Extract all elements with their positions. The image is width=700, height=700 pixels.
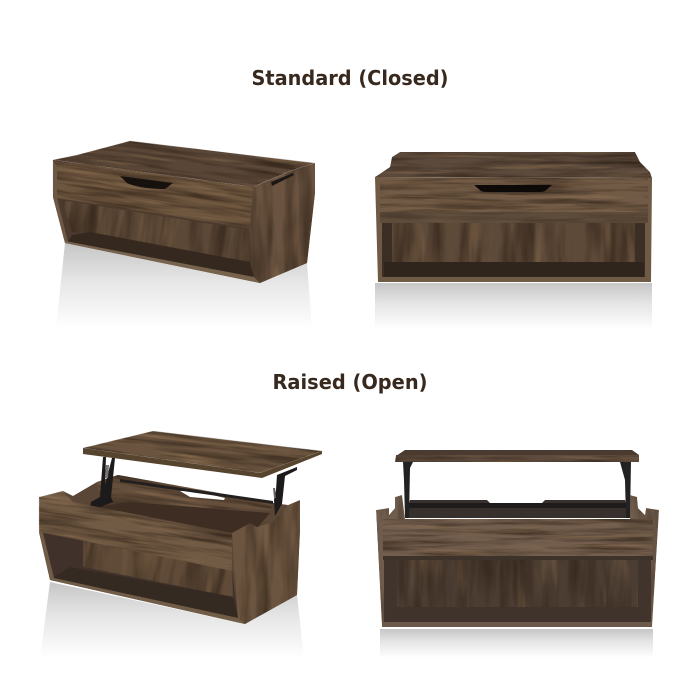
raised tabletop <box>395 450 639 462</box>
lower panel shade <box>380 212 648 223</box>
interior back wall <box>42 475 288 536</box>
floor shadow <box>375 283 652 330</box>
floor shadow <box>380 629 653 658</box>
front panel <box>380 178 648 223</box>
tabletop <box>47 109 321 219</box>
back panel <box>405 500 630 518</box>
back boards <box>74 518 242 620</box>
right lift mechanism <box>620 462 631 518</box>
title: Standard (Closed): Standard (Closed) <box>252 66 448 90</box>
opening <box>384 560 651 622</box>
back boards <box>55 177 257 285</box>
support bar <box>405 503 630 508</box>
right side panel <box>251 163 315 283</box>
right lift mechanism <box>273 467 297 516</box>
base silhouette <box>39 530 300 624</box>
front panel <box>383 519 653 558</box>
shelf floor <box>68 232 254 277</box>
left lift mechanism <box>403 462 413 518</box>
interior floor <box>90 502 270 533</box>
tabletop edge <box>395 455 639 462</box>
panel shadow line <box>383 556 653 560</box>
back boards <box>392 223 635 262</box>
left outer edge and bottom rail <box>39 532 245 624</box>
shelf floor <box>386 607 650 622</box>
raised tabletop <box>78 403 327 501</box>
tabletop face <box>78 403 327 501</box>
tabletop face <box>396 450 639 456</box>
opening <box>382 223 645 277</box>
upper tabletop <box>375 152 652 178</box>
table: raised, front view <box>376 450 659 658</box>
cabinet body <box>375 177 652 282</box>
lower shelf opening <box>57 198 254 277</box>
bottom edge <box>65 241 260 283</box>
table: raised, angled view <box>27 403 327 658</box>
title: Raised (Open): Raised (Open) <box>272 370 428 394</box>
handle slot <box>474 185 552 192</box>
lower shelf opening <box>43 533 238 618</box>
left lift mechanism <box>90 457 115 508</box>
table: closed, front view <box>375 152 652 330</box>
front panel <box>27 462 244 600</box>
back notch <box>180 491 225 500</box>
floor shadow <box>56 243 312 328</box>
front-right post <box>250 182 268 283</box>
floor shadow <box>40 582 304 658</box>
hinge slot <box>271 173 294 186</box>
base silhouette <box>53 160 315 283</box>
right side panel <box>232 500 300 624</box>
interior back boards <box>92 450 280 535</box>
left outer edge <box>53 160 68 243</box>
shelf floor <box>384 262 644 277</box>
shelf floor <box>52 567 238 618</box>
front panel and edges <box>43 133 263 259</box>
bottom rail <box>382 622 652 627</box>
tabletop edge <box>83 448 322 478</box>
front-right post <box>232 526 247 624</box>
table: closed, angled view <box>43 109 321 328</box>
back boards <box>397 560 638 607</box>
support bar <box>120 479 273 504</box>
cabinet body <box>376 495 659 627</box>
handle slot <box>120 176 173 189</box>
